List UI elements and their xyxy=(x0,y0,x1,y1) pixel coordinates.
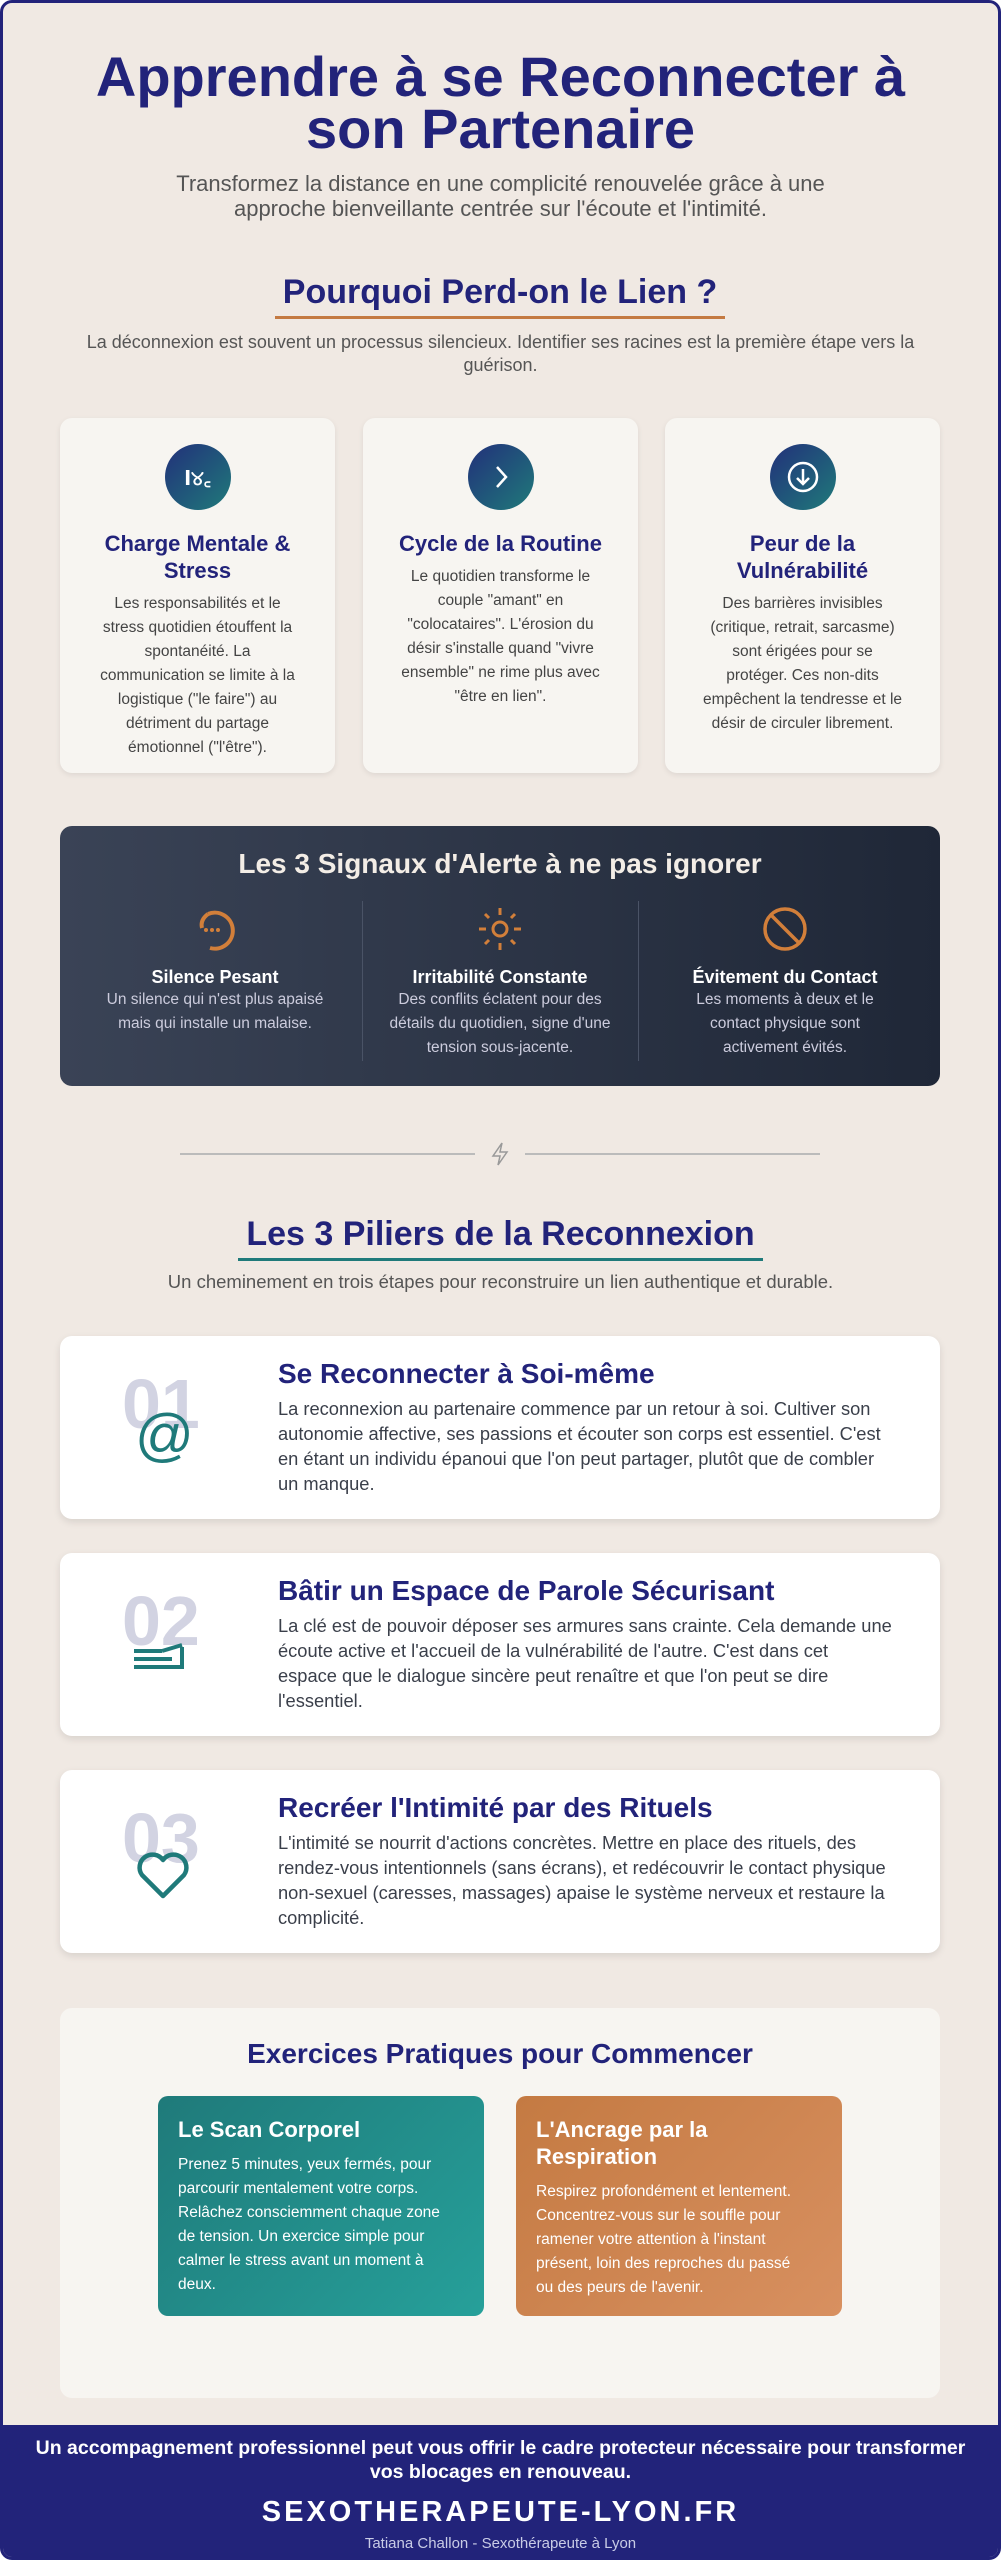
panel: vulnérabilité: protéger. Ces non-dits xyxy=(726,667,879,684)
exercise: scan corporel: Le Scan Corporel xyxy=(178,2117,360,2142)
exercise: respiration: présent, loin des reproches du passé xyxy=(536,2255,790,2272)
panel: charge mentale: Charge Mentale & xyxy=(105,531,290,556)
exercise: scan corporel: Prenez 5 minutes, yeux fermés, pour xyxy=(178,2156,431,2173)
subtitle: piliers: Un cheminement en trois étapes pour reconstruire un lien authentique et durable. xyxy=(168,1271,833,1292)
title xyxy=(96,45,906,160)
pillar 2: espace que le dialogue sincère peut renaître et que l'on peut se dire xyxy=(278,1665,828,1686)
heading: alert: Les 3 Signaux d'Alerte à ne pas ignorer xyxy=(238,848,762,879)
icon: heart xyxy=(137,1852,189,1898)
panel: vulnérabilité: sont érigées pour se xyxy=(732,643,873,660)
exercise: respiration xyxy=(516,2096,842,2316)
panel: charge mentale: logistique ("le faire") au xyxy=(118,691,277,708)
exercise: respiration: L'Ancrage par la xyxy=(536,2117,708,2142)
icon: sun xyxy=(479,908,521,950)
pillar 2: 02 xyxy=(122,1582,200,1660)
panel: routine: "être en lien". xyxy=(454,688,546,705)
icon: stress: ا୪꜀ xyxy=(184,468,211,490)
signal: silence: Un silence qui n'est plus apaisé xyxy=(107,991,323,1008)
panel: charge mentale: Les responsabilités et le xyxy=(114,595,281,612)
signal: irritabilité: Des conflits éclatent pour des xyxy=(398,991,602,1008)
panel: charge mentale: communication se limite à la xyxy=(100,667,295,684)
intro text: La déconnexion est souvent un processus silencieux. Identifier ses racines est la première étape vers la xyxy=(87,332,914,352)
signal: irritabilité xyxy=(390,908,610,1056)
pillar 3: complicité. xyxy=(278,1907,364,1928)
panel: routine xyxy=(363,418,638,773)
panel: vulnérabilité: Des barrières invisibles xyxy=(722,595,883,612)
footer xyxy=(3,2425,998,2560)
footer: vos blocages en renouveau. xyxy=(370,2461,631,2483)
icon: chevron xyxy=(468,444,534,510)
heading: pourquoi: Pourquoi Perd-on le Lien ? xyxy=(283,273,717,311)
icon: stress xyxy=(164,444,230,510)
exercise: respiration: Concentrez-vous sur le souffle pour xyxy=(536,2207,780,2224)
panel: vulnérabilité: (critique, retrait, sarcasme) xyxy=(710,619,895,636)
signal: irritabilité: tension sous-jacente. xyxy=(427,1039,573,1056)
signal: silence: Silence Pesant xyxy=(151,967,279,987)
footer: Un accompagnement professionnel peut vous offrir le cadre protecteur nécessaire pour transformer xyxy=(36,2437,965,2459)
panel: routine: Cycle de la Routine xyxy=(399,531,602,556)
panel: charge mentale: émotionnel ("l'être"). xyxy=(128,739,267,756)
panel: charge mentale: stress quotidien étouffent la xyxy=(103,619,292,636)
pillar 3: rendez-vous intentionnels (sans écrans), et redécouvrir le contact physique xyxy=(278,1857,886,1878)
pillar 3: Recréer l'Intimité par des Rituels xyxy=(278,1792,713,1823)
panel: vulnérabilité: Peur de la xyxy=(750,531,855,556)
exercise: scan corporel: Relâchez consciemment chaque zone xyxy=(178,2204,440,2221)
panel: vulnérabilité xyxy=(665,418,940,773)
panel: routine: "colocataires". L'érosion du xyxy=(407,616,594,633)
pillar 2: La clé est de pouvoir déposer ses armures sans crainte. Cela demande une xyxy=(278,1615,892,1636)
footer: SEXOTHERAPEUTE-LYON.FR xyxy=(262,2496,739,2528)
pillar 3: 03 xyxy=(122,1799,200,1877)
pillar 1: un manque. xyxy=(278,1473,375,1494)
heading: piliers: Les 3 Piliers de la Reconnexion xyxy=(246,1215,755,1253)
exercise: respiration: ramener votre attention à l'instant xyxy=(536,2231,766,2248)
exercise: respiration: Respirez profondément et lentement. xyxy=(536,2183,791,2200)
pillar 1 xyxy=(60,1336,940,1519)
pillar 2: l'essentiel. xyxy=(278,1690,363,1711)
pillar 3: L'intimité se nourrit d'actions concrètes. Mettre en place des rituels, des xyxy=(278,1832,856,1853)
signal: irritabilité: Irritabilité Constante xyxy=(412,967,588,987)
signal: évitement xyxy=(692,907,878,1056)
panel: routine: couple "amant" en xyxy=(438,592,563,609)
exercise: scan corporel: parcourir mentalement votre corps. xyxy=(178,2180,418,2197)
footer: Tatiana Challon - Sexothérapeute à Lyon xyxy=(365,2535,636,2552)
exercise: scan corporel: calmer le stress avant un moment à xyxy=(178,2252,424,2269)
intro text xyxy=(87,332,914,375)
pillar 3: non-sexuel (caresses, massages) apaise le système nerveux et restaure la xyxy=(278,1882,885,1903)
icon: lightning divider xyxy=(492,1142,508,1166)
panel: charge mentale: Stress xyxy=(164,558,231,583)
pillar 1: autonomie affective, ses passions et écouter son corps est essentiel. C'est xyxy=(278,1423,881,1444)
title: son Partenaire xyxy=(306,97,695,160)
pillar 1: en étant un individu épanoui que l'on peut partager, plutôt que de combler xyxy=(278,1448,874,1469)
panel: signaux d'alerte xyxy=(60,826,940,1086)
signal: évitement: Les moments à deux et le xyxy=(696,991,874,1008)
pillar 1: 01 xyxy=(122,1365,200,1443)
exercise: scan corporel: deux. xyxy=(178,2276,216,2293)
subtitle: Transformez la distance en une complicité renouvelée grâce à une xyxy=(176,171,825,196)
signal: évitement: contact physique sont xyxy=(710,1015,860,1032)
pillar 3 xyxy=(60,1770,940,1953)
panel: vulnérabilité: désir de circuler librement. xyxy=(712,715,893,732)
subtitle: approche bienveillante centrée sur l'écoute et l'intimité. xyxy=(234,196,767,221)
panel: routine: désir s'installe quand "vivre xyxy=(407,640,594,657)
signal: évitement: activement évités. xyxy=(723,1039,847,1056)
pillar 2: Bâtir un Espace de Parole Sécurisant xyxy=(278,1575,774,1606)
pillar 2 xyxy=(60,1553,940,1736)
icon: silence xyxy=(200,910,235,951)
panel: charge mentale xyxy=(60,418,335,773)
signal: silence: mais qui installe un malaise. xyxy=(118,1015,312,1032)
panel: exercices xyxy=(60,2008,940,2398)
panel: routine: ensemble" ne rime plus avec xyxy=(401,664,600,681)
heading: exercices: Exercices Pratiques pour Commencer xyxy=(247,2038,753,2069)
exercise: respiration: Respiration xyxy=(536,2144,657,2169)
icon: no xyxy=(763,907,807,951)
icon: at: @ xyxy=(135,1403,194,1468)
icon: down circle xyxy=(770,444,836,510)
exercise: scan corporel: de tension. Un exercice simple pour xyxy=(178,2228,424,2245)
intro text: guérison. xyxy=(463,355,538,375)
signal: silence xyxy=(107,910,323,1032)
signal: irritabilité: détails du quotidien, signe d'une xyxy=(390,1015,610,1032)
signal: évitement: Évitement du Contact xyxy=(692,967,878,987)
subtitle xyxy=(176,171,825,221)
pillar 1: La reconnexion au partenaire commence par un retour à soi. Cultiver son xyxy=(278,1398,870,1419)
panel: routine: Le quotidien transforme le xyxy=(411,568,590,585)
icon: arrows xyxy=(134,1643,184,1669)
panel: vulnérabilité: empêchent la tendresse et le xyxy=(703,691,902,708)
panel: charge mentale: détriment du partage xyxy=(126,715,269,732)
pillar 2: écoute active et l'accueil de la vulnérabilité de l'autre. C'est dans cet xyxy=(278,1640,828,1661)
title: Apprendre à se Reconnecter à xyxy=(96,45,905,108)
panel: charge mentale: spontanéité. La xyxy=(144,643,250,660)
pillar 1: Se Reconnecter à Soi-même xyxy=(278,1358,655,1389)
panel: vulnérabilité: Vulnérabilité xyxy=(737,558,868,583)
exercise: respiration: ou des peurs de l'avenir. xyxy=(536,2279,704,2296)
exercise: scan corporel xyxy=(158,2096,484,2316)
